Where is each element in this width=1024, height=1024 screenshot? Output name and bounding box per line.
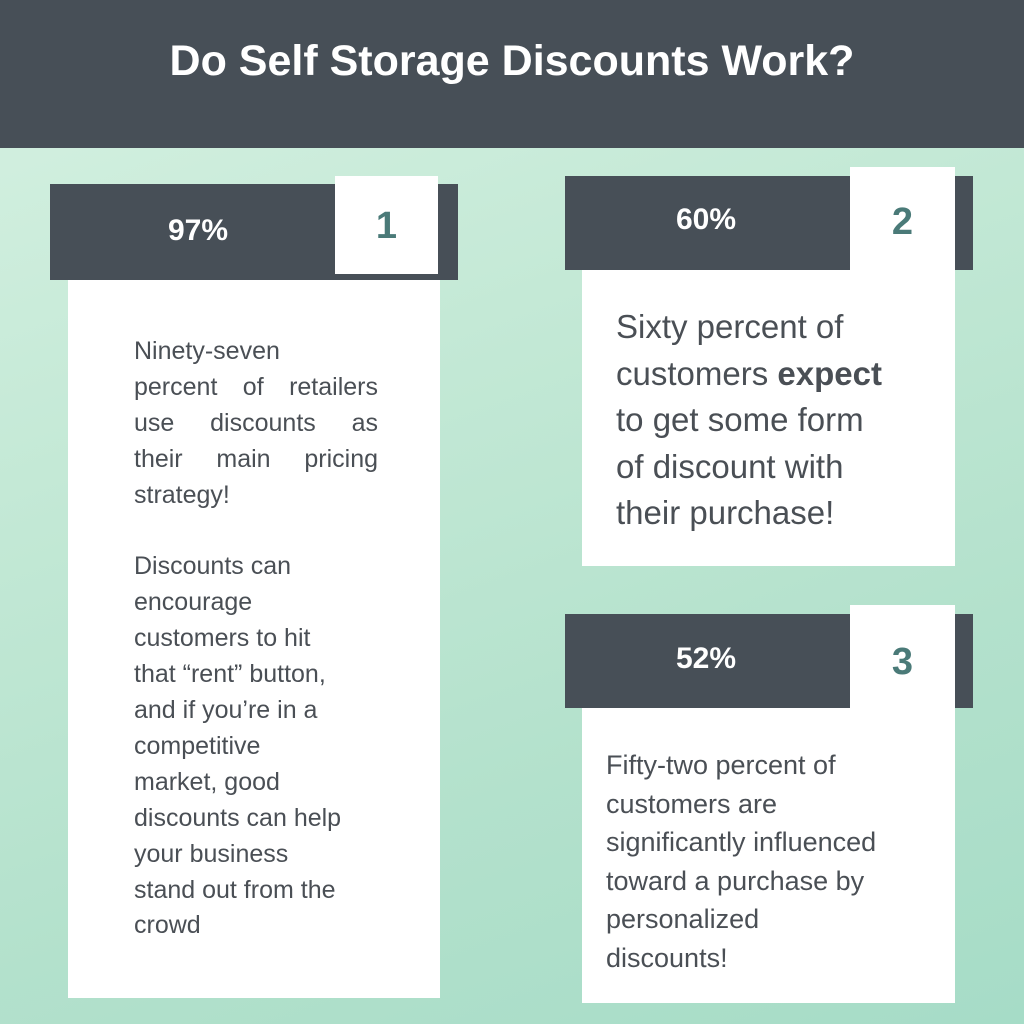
card body 1: your business	[134, 840, 288, 868]
card body 2: customers expect	[616, 354, 882, 392]
card body 2: Sixty percent of	[616, 308, 843, 345]
card body 1: customers to hit	[134, 624, 310, 652]
card body 1: encourage	[134, 588, 252, 616]
card body 3: significantly influenced	[606, 827, 876, 857]
card body 2	[582, 270, 955, 566]
number box 2	[850, 167, 955, 270]
header bar 1	[50, 184, 458, 280]
card body 1: percent of retailers	[134, 373, 378, 401]
panel 2	[565, 167, 973, 566]
number box 3	[850, 605, 955, 708]
card body 1: competitive	[134, 732, 260, 760]
stat 97%: 97%	[168, 214, 228, 247]
card body 3: Fifty-two percent of	[606, 750, 836, 780]
card body 1: their main pricing	[134, 445, 378, 473]
card body 1: Ninety-seven	[134, 337, 280, 365]
header bar 3	[565, 614, 973, 708]
card body 1: strategy!	[134, 481, 230, 509]
card body 1: and if you’re in a	[134, 696, 317, 724]
header bar 2	[565, 176, 973, 270]
card body 3: discounts!	[606, 942, 728, 972]
card body 1: use discounts as	[134, 409, 378, 437]
card body 2: of discount with	[616, 448, 843, 484]
title: Do Self Storage Discounts Work?	[170, 37, 854, 85]
panel 3	[565, 605, 973, 1003]
card body 2: to get some form	[616, 401, 864, 438]
card body 3: customers are	[606, 788, 777, 818]
number box 2: 2	[892, 201, 913, 243]
card body 1: market, good	[134, 768, 280, 796]
number box 3: 3	[892, 641, 913, 683]
card body 1: stand out from the	[134, 876, 336, 904]
card body 1: discounts can help	[134, 804, 341, 832]
card body 1: Discounts can	[134, 552, 291, 580]
card body 1	[68, 280, 440, 998]
card body 3	[582, 708, 955, 1003]
header	[0, 0, 1024, 148]
card body 1: that “rent” button,	[134, 660, 326, 688]
number box 1	[335, 176, 438, 274]
number box 1: 1	[376, 205, 397, 247]
stat 60%: 60%	[676, 203, 736, 236]
card body 1: crowd	[134, 911, 201, 939]
card body 3: personalized	[606, 904, 759, 934]
panel 1	[50, 176, 458, 998]
card body 2: their purchase!	[616, 494, 834, 531]
card body 3: toward a purchase by	[606, 866, 864, 896]
stat 52%: 52%	[676, 642, 736, 675]
